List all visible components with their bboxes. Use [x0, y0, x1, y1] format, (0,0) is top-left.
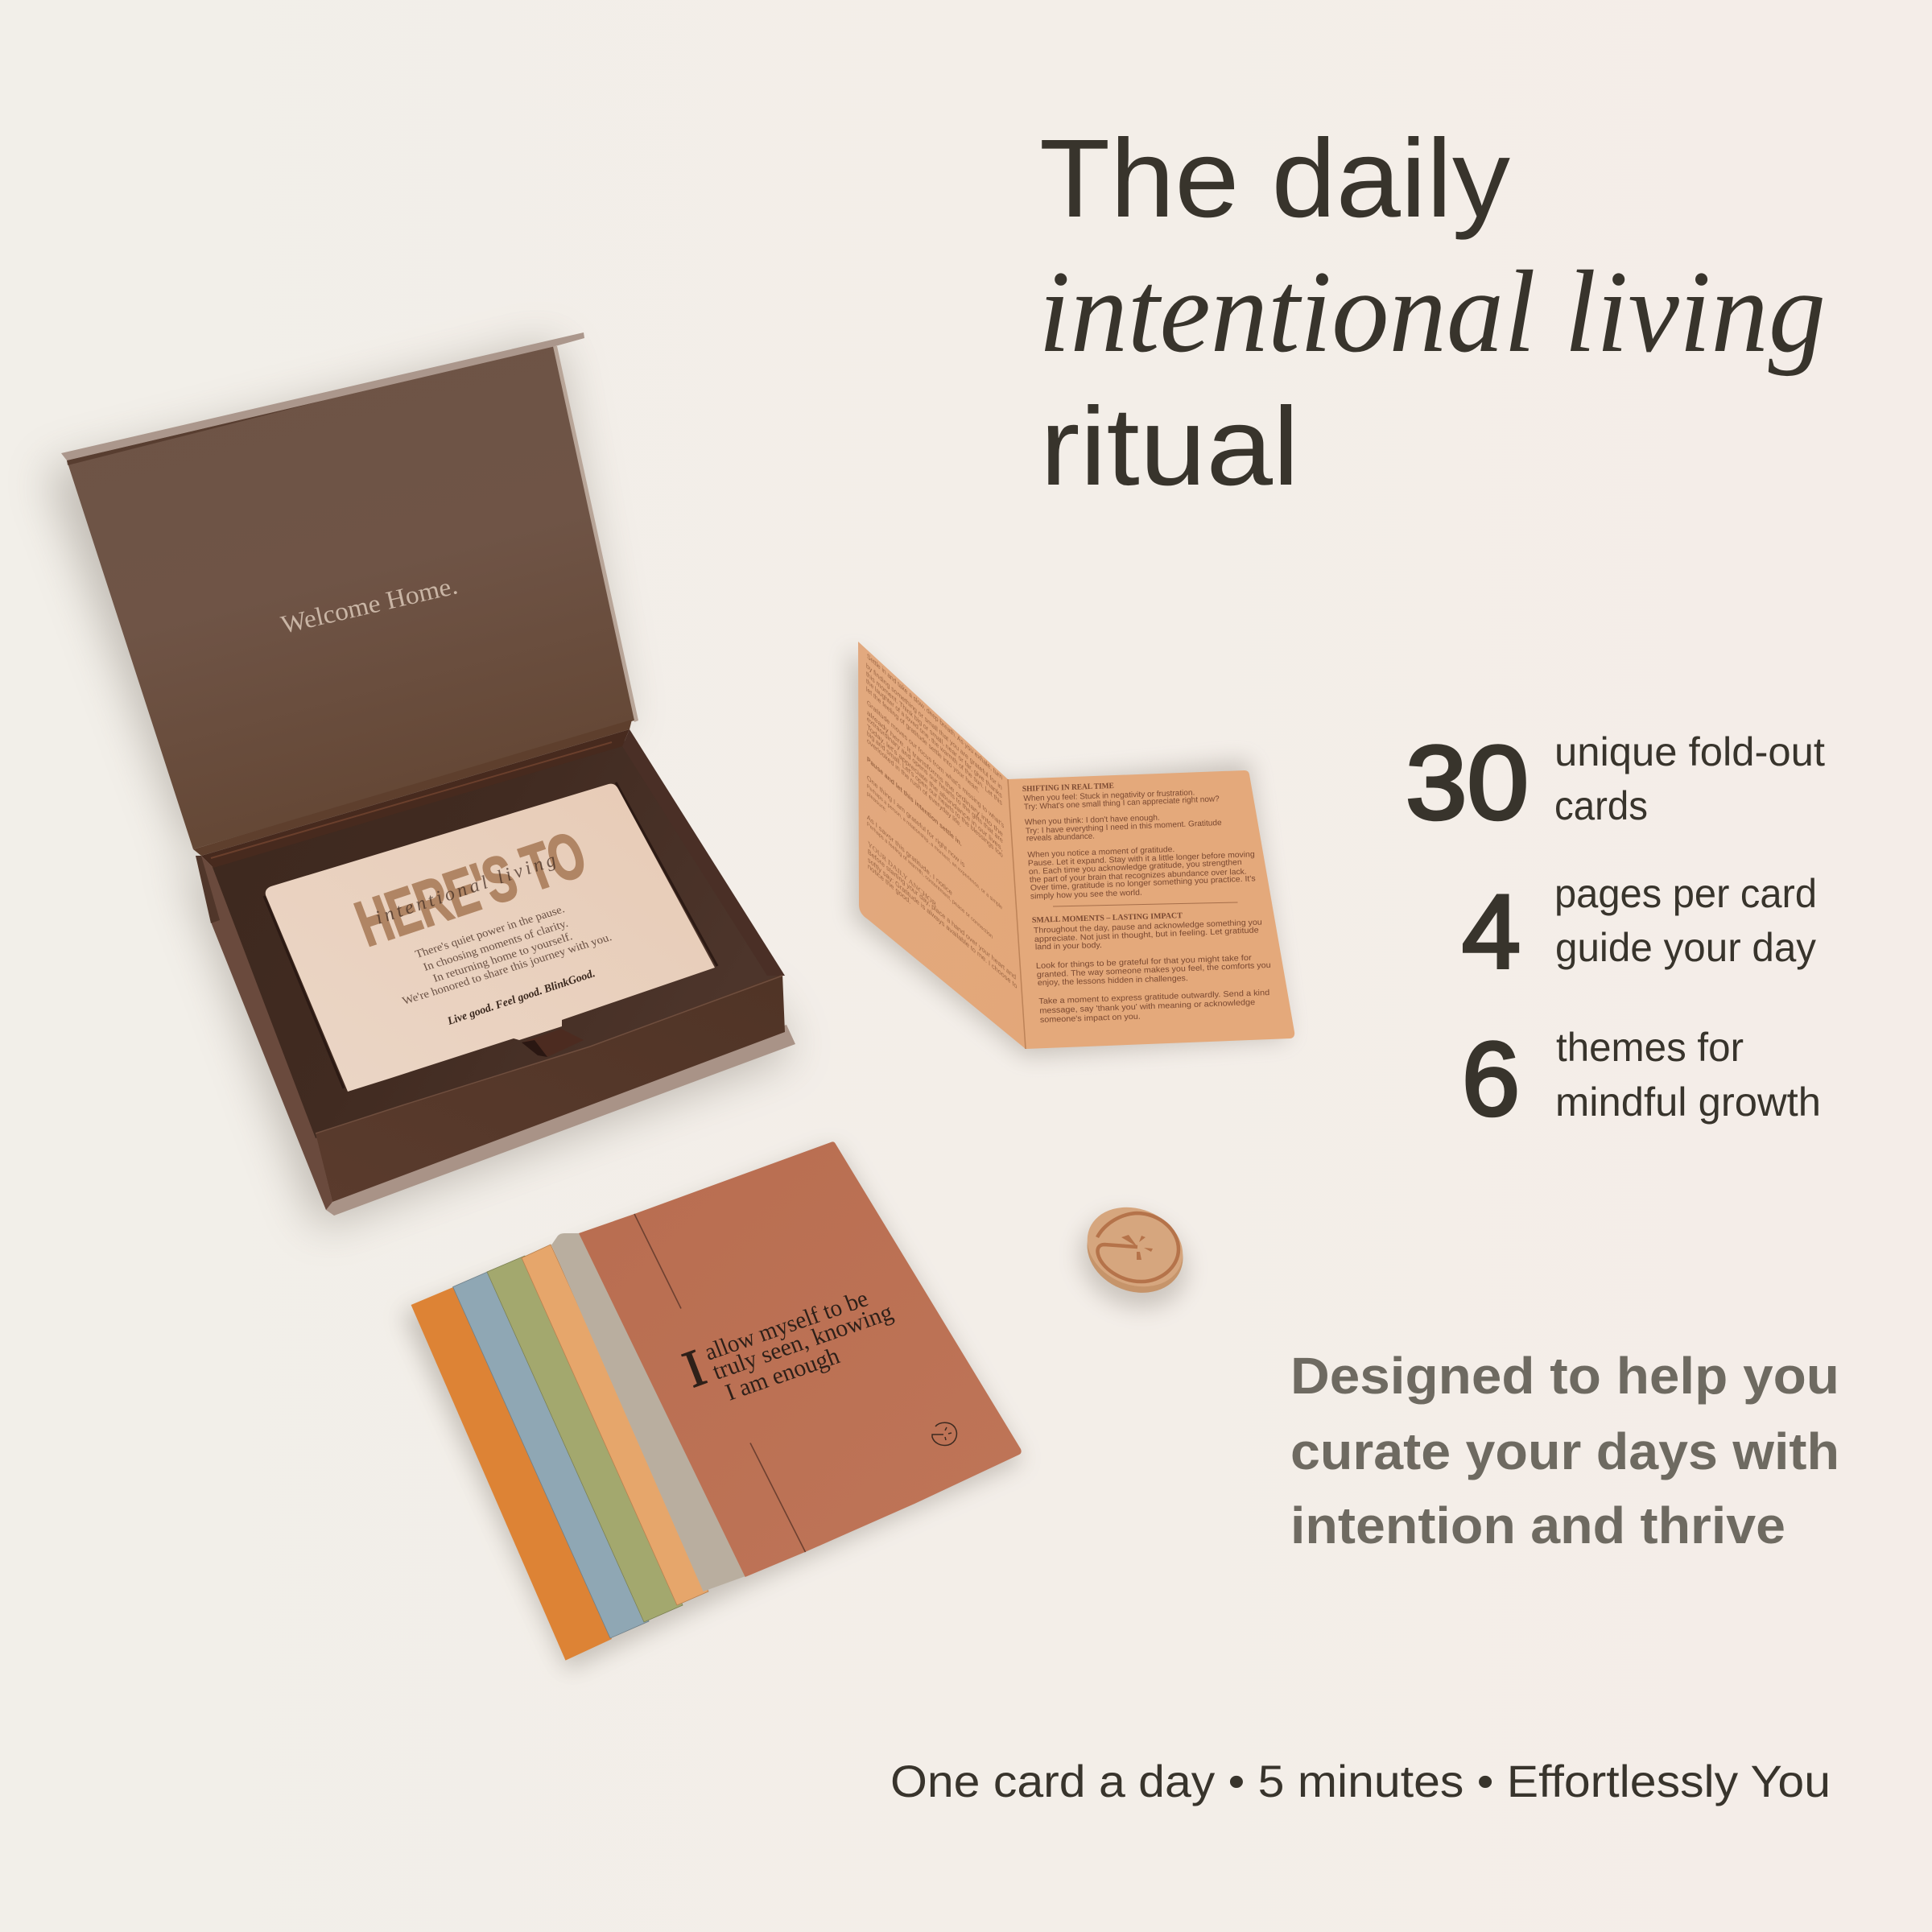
- left page text: [866, 651, 1018, 991]
- product: gift box: [47, 332, 795, 1228]
- terracotta front card: [579, 1141, 1022, 1577]
- left page text: extraordinary and opens our hearts to the gifts that are: [867, 714, 1003, 845]
- left page text: notice the good.: [868, 861, 910, 906]
- coin face: [1075, 1194, 1195, 1300]
- stat: 30 unique fold-out cards: cards: [1554, 783, 1648, 828]
- left page text: YOUR DAILY ANCHOR: [868, 839, 936, 909]
- card heading: HERE'S TO: [347, 818, 595, 960]
- product: wooden coin: [1066, 1194, 1201, 1325]
- footer line: One card a day • 5 minutes • Effortlessly You: [890, 1756, 1831, 1806]
- stat: 30 unique fold-out cards: 30: [1406, 724, 1529, 841]
- product: open fold-out card: [850, 642, 1294, 1056]
- left page text: big and small. Let's open our hearts to the blessings too: [867, 729, 1003, 860]
- front rim highlight: [316, 976, 782, 1133]
- card message: In choosing moments of clarity.: [422, 918, 570, 974]
- right page text: enjoy, the lessons hidden in challenges.: [1038, 974, 1188, 988]
- box shadow: [47, 342, 793, 1228]
- stat: 6 themes for mindful growth: themes for: [1556, 1025, 1744, 1070]
- right page text: When you notice a moment of gratitude.: [1027, 845, 1174, 860]
- stat: 30 unique fold-out cards: unique fold-out: [1554, 729, 1825, 774]
- affirmation text: [675, 1285, 897, 1406]
- coin shadow: [1066, 1199, 1201, 1325]
- product: fan of coloured cards: [402, 1141, 1022, 1670]
- right page text: simply how you see the world.: [1030, 889, 1142, 901]
- right page text: granted. The way someone makes you feel, the comforts you: [1037, 961, 1271, 980]
- right page text: Look for things to be grateful for that you might take for: [1036, 954, 1253, 971]
- stat: 4 pages per card: guide your day: [1555, 925, 1816, 970]
- pull tab: [522, 1029, 584, 1057]
- card message: In returning home to yourself.: [431, 931, 574, 985]
- open lid: [61, 332, 638, 849]
- green card: [487, 1256, 683, 1622]
- left page text: overlooked in the rush of everyday life.: [867, 736, 961, 829]
- right page text: Try: What's one small thing I can appreciate right now?: [1024, 795, 1220, 811]
- card message: Live good. Feel good. BlinkGood.: [445, 968, 597, 1028]
- stat: 4 pages per card: [1462, 871, 1817, 990]
- card message: [401, 903, 613, 1028]
- title: intentional living: [1038, 246, 1826, 377]
- page divider: [1053, 902, 1238, 906]
- right page text: appreciate. Not just in thought, but in feeling. Let gratitude: [1034, 926, 1259, 944]
- stat: 6 themes for mindful growth: mindful growth: [1555, 1080, 1821, 1125]
- box base edge: [212, 924, 795, 1216]
- tagline: curate your days with: [1290, 1422, 1839, 1480]
- right page text: When you feel: Stuck in negativity or frustration.: [1023, 789, 1195, 803]
- card in box: [264, 782, 717, 1092]
- right page text: on. Each time you acknowledge gratitude, you strengthen: [1029, 858, 1242, 877]
- grey card: [551, 1233, 745, 1591]
- right wall: [622, 729, 785, 976]
- fan shadow: [402, 1147, 1022, 1670]
- right page text: land in your body.: [1035, 941, 1102, 952]
- left page text: As I savor this gratitude, I notice: [867, 812, 952, 898]
- well floor: [211, 739, 782, 1138]
- inner rim: [201, 729, 630, 868]
- left page text: this moment. Think big or small, near or far, give thanks: [866, 669, 1002, 800]
- card message: We're honored to share this journey with you.: [401, 931, 613, 1008]
- card logo: [932, 1422, 956, 1445]
- box left wall: [201, 856, 332, 1210]
- right page text: SHIFTING IN REAL TIME: [1022, 782, 1114, 794]
- stat: 4 pages per card: 4: [1462, 873, 1521, 990]
- right page text: Throughout the day, pause and acknowledge something you: [1034, 919, 1262, 935]
- right page text: Take a moment to express gratitude outwardly. Send a kind: [1038, 989, 1269, 1006]
- hinge strip: [193, 720, 632, 856]
- left page text: One thing I am grateful for right now is: [867, 773, 964, 869]
- right page text: message, say 'thank you' with meaning or acknowledge: [1039, 998, 1256, 1016]
- right page text: someone's impact on you.: [1040, 1013, 1141, 1025]
- orange card: [411, 1285, 612, 1661]
- right page text: reveals abundance.: [1026, 832, 1095, 843]
- coin logo: [1097, 1213, 1179, 1282]
- tagline: intention and thrive: [1290, 1496, 1785, 1554]
- right page text: Try: I have everything I need in this moment. Gratitude: [1026, 819, 1222, 836]
- title: [1038, 117, 1826, 509]
- tagline: [1290, 1347, 1839, 1554]
- affirmation text: truly seen, knowing: [709, 1298, 897, 1385]
- left page text: Pause and let this intention settle in.: [867, 754, 962, 848]
- card script: intentional living: [373, 850, 559, 929]
- title: ritual: [1040, 385, 1299, 509]
- left page text: Perhaps a feeling of warmth, contentment, peace or connection: [867, 821, 993, 940]
- right page text: SMALL MOMENTS – LASTING IMPACT: [1032, 911, 1183, 925]
- tagline: Designed to help you: [1290, 1347, 1839, 1405]
- left rim: [196, 856, 220, 923]
- peach card: [522, 1245, 708, 1605]
- left page: [858, 642, 1026, 1049]
- stat: 6 themes for mindful growth: 6: [1462, 1020, 1520, 1137]
- left page text: pleasure.: [867, 791, 886, 814]
- left page text: Today, let's appreciate the abundance in our lives,: [867, 722, 1003, 853]
- lid text: Welcome Home.: [279, 571, 460, 639]
- left page text: Gratitude moves our focus from what's missing to what's: [867, 698, 1004, 830]
- affirmation text: I: [675, 1339, 713, 1399]
- rim sheen: [211, 742, 612, 858]
- left page text: Before starting your day, place a hand over your heart and: [868, 847, 1016, 981]
- card message: There's quiet power in the pause.: [414, 903, 567, 961]
- right page text: When you think: I don't have enough.: [1025, 814, 1160, 827]
- affirmation text: allow myself to be: [701, 1285, 872, 1366]
- stat: 30 unique fold-out cards: [1406, 724, 1825, 841]
- left page text: by finding something or small that you are grateful for in: [866, 661, 1002, 792]
- front wall: [316, 974, 785, 1202]
- left page text: the laughter of a loved one, the warmth of the sun. Let this: [866, 676, 1002, 807]
- left page text: Settle in and take a slow, deep breath. As you exhale, turn: [867, 651, 1002, 782]
- stat: 6 themes for mindful growth: [1462, 1020, 1821, 1137]
- right page text: Pause. Let it expand. Stay with it a little longer before moving: [1028, 850, 1255, 868]
- left page text: softly say: Gratitude is always available to me. I choose to: [868, 855, 1018, 991]
- left page text: Perhaps a person, a relationship, a moment, an experience, or a simple: [867, 783, 1002, 911]
- right page text: [1022, 782, 1271, 1025]
- coin side: [1075, 1197, 1195, 1307]
- title: The daily: [1039, 117, 1510, 241]
- right page: [1008, 770, 1294, 1049]
- left page text: already here. It transforms the ordinary into the: [867, 708, 1003, 839]
- affirmation text: I am enough: [722, 1343, 843, 1406]
- right page text: Over time, gratitude is no longer something you practice. It's: [1030, 874, 1256, 893]
- blue card: [453, 1270, 649, 1638]
- right page text: the part of your brain that recognizes abundance over lack.: [1030, 868, 1247, 885]
- fold card shadow: [850, 648, 1288, 1056]
- stat: 4 pages per card: pages per card: [1554, 871, 1817, 916]
- left page text: let the feeling of gratitude settle into your heart.: [866, 684, 980, 795]
